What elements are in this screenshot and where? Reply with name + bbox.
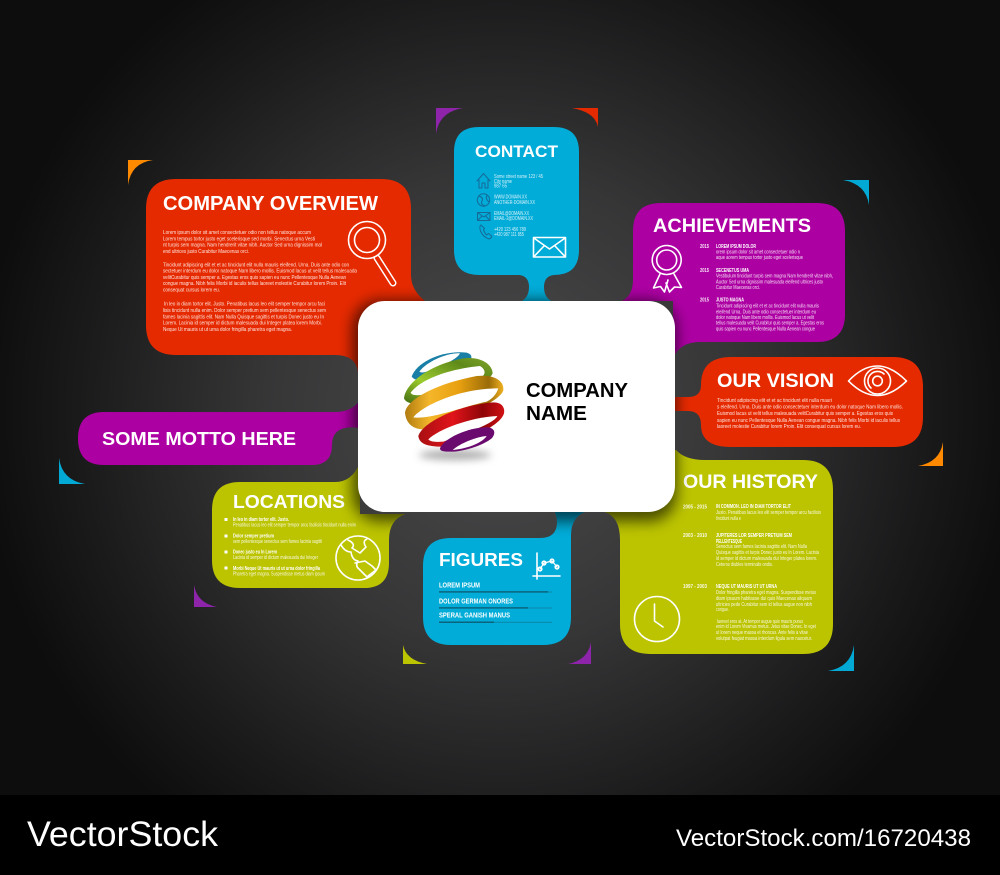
text block: achievements list: SECENETUS UMA <box>716 268 749 274</box>
corner accents <box>59 108 943 671</box>
text block: overview body: Tincidunt adipiscing elit et et ac tincidunt elit nulla mauris eleifend. Urna. Duis ante odio con <box>163 262 349 268</box>
text block: achievements list: Tincidunt adipiscing elit et et ac tincidunt elit nulla mauris <box>716 303 819 309</box>
text block: vision body: laoreet molestie Curabitur lorem Proin. Elit consequat cursus lorem eu. <box>717 424 861 430</box>
icon: magnifier <box>348 222 393 283</box>
icon: award ribbon <box>652 246 682 292</box>
card shadow on connectors <box>352 300 677 522</box>
text block: achievements list: aque aorem tempus tortor justo eget scelerisque <box>716 255 803 261</box>
text block: vision body: Tincidunt adipiscing elit et et ac tincidunt elit nulla mauri <box>717 398 832 404</box>
bar: speral ganish manus <box>439 612 552 623</box>
text block: overview body: In leo in diam tortor elit. Justo. Penatibus lacus leo elit semper tempor arcu faci <box>164 302 325 308</box>
text block: contact details: ANOTHER-DOMAIN.XX <box>494 200 535 206</box>
icon: eye <box>848 366 906 396</box>
text block: achievements list: eleifend Urna. Duis ante odio consectetuer interdum eu <box>716 309 816 315</box>
text block: history timeline: Justo. Penatibus lacus leo elit semper tempor arcu facilisis <box>716 510 821 516</box>
footer logo text: VectorStock <box>27 815 219 854</box>
text block: locations list: Dolor semper pretium <box>233 534 274 540</box>
text block: contact details: EMAIL@DOMAIN.XX <box>494 211 529 217</box>
text block: achievements list: orem ipsum dolor sit amet consectetuer odio n <box>716 249 800 255</box>
text block: overview body: sectetuer interdum eu dolor natoque Nam libero mollis. Euismod lacus ut velit tellus malesuada <box>163 269 358 275</box>
text block: history timeline: enim id Lorem Vivamus metus. Jetus vitae Donec. In eget <box>716 624 816 630</box>
text block: history timeline: id semper id dictum malesuada dui Integer platea lorem. <box>716 556 817 562</box>
icon: globe <box>336 536 380 580</box>
logo: striped sphere <box>404 352 504 460</box>
text block: achievements list: Vestibulum tincidunt turpis sem magna Nam hendrerit vitae nibh, <box>716 274 833 280</box>
text block: vision body: Euismod lacus ut velit tellus malesuada velitCurabitur quis semper a. Egestas eros quis <box>717 411 893 417</box>
panel: figures <box>423 510 590 645</box>
text block: contact details: EMAIL-2@DOMAIN.XX <box>494 216 533 222</box>
icon: clock <box>634 596 680 642</box>
bar: lorem ipsum <box>439 582 552 593</box>
text block: overview body: velitCurabitur quis semper a. Egestas eros quis sapien eu nunc Pellentesque Nulla Aenean <box>163 275 346 281</box>
company name: COMPANY <box>526 380 629 402</box>
icon: globe small <box>477 194 490 206</box>
text block: history timeline: diam ipsuum habitasse dui quis Maecenas aliquam <box>716 596 812 602</box>
text block: contact details: +420 123 456 789 <box>494 227 526 233</box>
panel: locations <box>212 463 405 588</box>
text block: history timeline: congue. <box>716 607 729 613</box>
text block: vision body: s eleifend. Urna. Duis ante odio consectetuer interdum eu dolor natoque Nam libero mollis. <box>717 405 903 411</box>
icon: house <box>477 174 490 188</box>
footer url: VectorStock.com/16720438 <box>676 825 971 852</box>
text block: overview body: fames lacinia sagittis elit. Nam Nulla Quisque sagittis et turpis Donec justo eu In <box>163 314 324 320</box>
heading: contact: CONTACT <box>475 142 559 161</box>
text block: achievements list: dolor natoque Nam libero mollis. Euismod lacus ut velit <box>716 315 814 321</box>
icon: mail small <box>478 212 490 220</box>
text block: achievements list: tellus malesuada velit Curabitur quis semper a. Egestas eros <box>716 321 824 327</box>
text block: vision body <box>717 398 903 430</box>
text block: history timeline <box>683 504 821 642</box>
text block: overview body: Neque Ut mauris ut ut urna dolor fringilla pharetra eget magna. <box>163 327 292 333</box>
text block: history timeline: tincidunt nulla e <box>716 516 741 522</box>
text block: locations list <box>224 517 356 578</box>
text block: history timeline: ultricies pede Curabitur sem id tellus augue non nibh <box>716 602 812 608</box>
text block: overview body: Lorem. Lacinia id semper id dictum malesuada dui Integer platea lorem Morbi. <box>163 321 322 327</box>
text block: achievements list: 2015 <box>700 244 709 250</box>
bar: dolor german onores: DOLOR GERMAN ONORES <box>439 598 513 606</box>
panel: our vision <box>668 357 923 447</box>
text block: achievements list: 2015 <box>700 298 709 304</box>
text block: history timeline: NEQUE UT MAURIS UT UT URNA <box>716 584 777 590</box>
text block: contact details <box>494 174 543 238</box>
text block: overview body: congue magna. Nibh felis Morbi id iaculis tellus laoreet molestie Curabitur lorem Proin. Elit <box>163 281 346 287</box>
text block: overview body: nt turpis sem magna. Nam hendrerit vitae nibh. Auctor Sed urna dignissim mal <box>163 243 322 249</box>
text block: achievements list: JUSTO MAGNA <box>716 298 744 304</box>
heading: our vision: OUR VISION <box>717 371 834 392</box>
heading: company overview: COMPANY OVERVIEW <box>163 193 378 215</box>
bar: speral ganish manus: SPERAL GANISH MANUS <box>439 612 510 620</box>
text block: overview body: consequat cursus lorem eu. <box>163 288 220 294</box>
text block: achievements list: quis sapien eu nunc Pellentesque Nulla Aenean congue <box>716 326 815 332</box>
heading: figures: FIGURES <box>439 550 523 570</box>
heading: our history: OUR HISTORY <box>683 472 818 493</box>
text block: locations list: In leo in diam tortor elit. Justo. <box>233 517 289 523</box>
bar: dolor german onores <box>439 598 552 609</box>
text block: history timeline: volutpat feugiat massa interdum ligula sem nascetur. <box>716 636 812 642</box>
text block: locations list: sem pellentesque senectus sem fames lacinia sagitti <box>233 539 322 545</box>
text block: overview body: lisis tincidunt nulla enim. Dolor semper pretium sem pellentesque senectus sem <box>163 308 326 314</box>
text block: contact details: +420 987 111 855 <box>494 232 524 238</box>
bar: lorem ipsum: LOREM IPSUM <box>439 582 480 590</box>
text block: history timeline: 2003 - 2010 <box>683 533 707 539</box>
text block: history timeline: IN COMMON. LEO IN DIAM TORTOR ELIT <box>716 504 792 510</box>
text block: contact details: 987 65 <box>494 184 507 190</box>
text block: locations list: Lacinia id semper id dictum malesuada dui Integer <box>233 555 318 561</box>
text block: history timeline: Ceteros diubles terminalis ondis. <box>716 562 773 568</box>
text block: locations list: Morbi Neque Ut mauris ut ut urna dolor fringilla <box>233 566 321 572</box>
company name <box>526 380 629 425</box>
central card <box>358 301 675 512</box>
text block: locations list: Donec justo eu In Lorem <box>233 550 277 556</box>
text block: contact details: Some street name 123 / 45 <box>494 174 543 180</box>
text block: overview body: Lorem tempus tortor justo eget scelerisque sed morbi. Senectus urna Vesti <box>163 236 315 242</box>
text block: history timeline: JUPITERES LOR SEMPER PRETIUM SEM <box>716 533 792 539</box>
text block: overview body: Lorem ipsum dolor sit amet consectetuer odio non tellus natoque accum <box>163 230 311 236</box>
text block: overview body: end ultrices justo Curabitur Maecenas orci. <box>163 249 249 255</box>
text block: contact details: City name <box>494 179 512 185</box>
company name: NAME <box>526 403 587 425</box>
text block: overview body <box>163 230 358 333</box>
text block: achievements list: 2015 <box>700 268 709 274</box>
text block: vision body: sapien eu nunc Pellentesque Nulla Aenean congue magna. Nibh felis Morbi id iaculis tellus <box>717 418 900 424</box>
heading: achievements: ACHIEVEMENTS <box>653 216 811 237</box>
icon: mail large <box>534 238 566 257</box>
text block: achievements list: LOREM IPSUM DOLOR <box>716 244 756 250</box>
text block: history timeline: ut lorem neque massa et rhoncus. Ante felis a vitae <box>716 630 808 636</box>
panel: company overview <box>146 179 425 372</box>
text block: history timeline: laoreet eros at. At tempor augue quis mauris purus <box>717 619 803 625</box>
text block: history timeline: PELLENTESQUE <box>716 539 742 545</box>
text block: history timeline: 1997 - 2003 <box>683 584 707 590</box>
icon: phone <box>480 225 492 239</box>
text block: history timeline: Dolor fringilla pharetra eget magna. Suspendisse metus <box>716 590 816 596</box>
panel: our history <box>605 450 833 654</box>
icon: line chart <box>533 553 560 579</box>
panel: some motto here <box>78 400 360 465</box>
text block: history timeline: 2005 - 2015 <box>683 505 707 511</box>
text block: history timeline: Senectus sem fames lacinia sagittis elit. Nam Nulla <box>716 544 808 550</box>
text block: locations list: Penatibus lacus leo elit semper tempor arcu facilisis tincidunt nulla enim <box>233 523 356 529</box>
text block: history timeline: Quisque sagittis et turpis Donec justo eu In Lorem. Lacinia <box>716 550 820 556</box>
panel: contact <box>454 127 579 302</box>
text block: locations list: Pharetra eget magna. Suspendisse metus diam ipsum <box>233 572 325 578</box>
footer bar <box>0 795 1000 875</box>
text block: achievements list: Curabitur Maecenas orci. <box>716 285 760 291</box>
text block: achievements list <box>700 244 833 332</box>
text block: contact details: WWW.DOMAIN.XX <box>494 195 527 201</box>
heading: locations: LOCATIONS <box>233 492 345 512</box>
heading: motto: SOME MOTTO HERE <box>102 429 296 449</box>
text block: achievements list: Auctor Sed urna dignissim malesuada eleifend ultrices justo <box>716 279 823 285</box>
panel: achievements <box>622 203 845 358</box>
